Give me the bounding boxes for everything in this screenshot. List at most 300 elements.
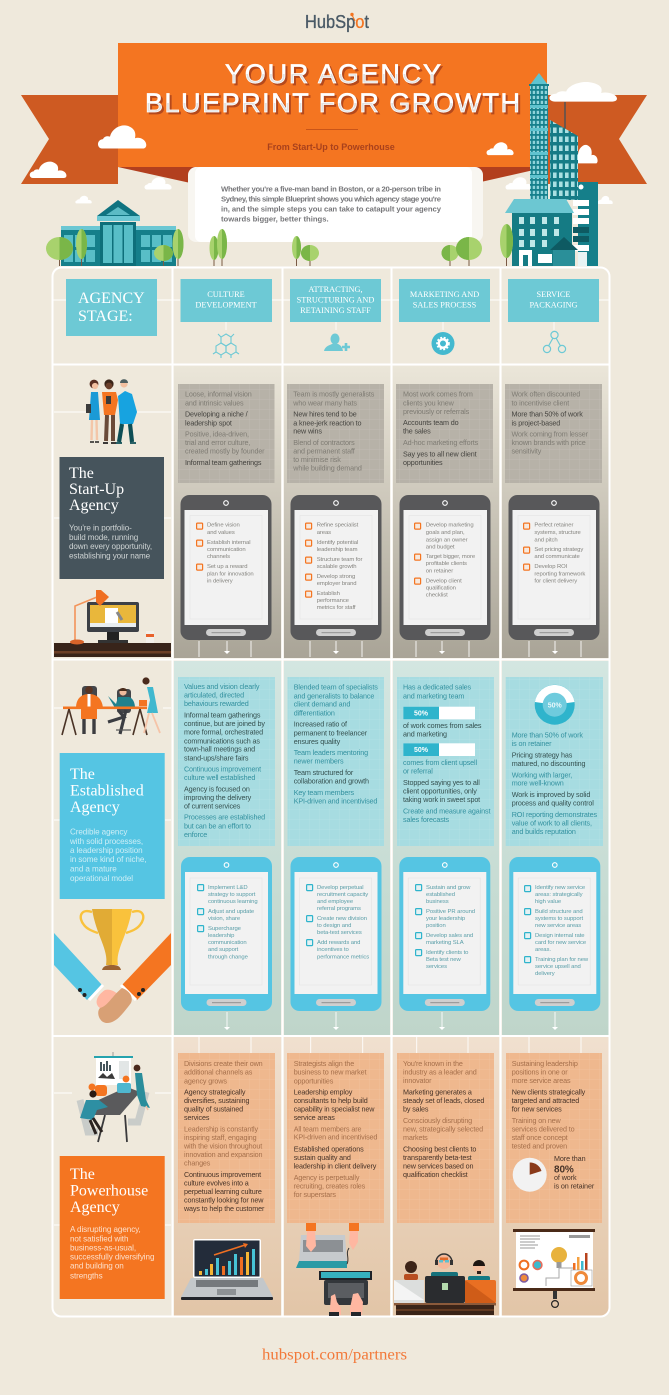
panel: established marketing: comes from client upsell bbox=[403, 758, 478, 767]
panel: powerhouse marketing: Consciously disrupting bbox=[403, 1116, 472, 1125]
phone: established marketing: established bbox=[426, 892, 455, 898]
panel: powerhouse staff: capability in specialist new bbox=[294, 1105, 375, 1114]
header: agency stage bbox=[66, 279, 157, 336]
panel: powerhouse agency: Agency bbox=[70, 1199, 120, 1216]
panel: established marketing: sales forecasts bbox=[403, 815, 450, 824]
panel: established staff: Team leaders mentoring bbox=[294, 748, 368, 757]
panel: powerhouse service bbox=[506, 1053, 602, 1223]
panel: powerhouse culture: Agency strategically bbox=[184, 1088, 246, 1097]
phone: start-up service: and communicate bbox=[534, 554, 580, 560]
illustration: start-up team bbox=[86, 379, 137, 443]
panel: powerhouse agency: The bbox=[70, 1166, 95, 1183]
phone: start-up staff: Develop strong bbox=[317, 574, 355, 580]
panel: powerhouse service: 80% bbox=[554, 1164, 574, 1176]
panel: powerhouse staff: recruiting, creates roles bbox=[294, 1182, 366, 1191]
panel: powerhouse service: New clients strategically bbox=[512, 1088, 586, 1097]
phone: established staff bbox=[290, 857, 382, 1011]
panel: start-up staff: new wins bbox=[293, 427, 322, 436]
phone: start-up marketing: on retainer bbox=[426, 568, 453, 574]
phone: start-up culture: and values bbox=[207, 530, 235, 536]
phone: established marketing: marketing SLA bbox=[426, 940, 464, 946]
header: attracting staff bbox=[290, 279, 381, 322]
panel: start-up marketing: clients you knew bbox=[403, 398, 455, 407]
header: attracting staff: RETAINING STAFF bbox=[300, 306, 371, 315]
panel: powerhouse culture: ways to help the customer bbox=[183, 1204, 265, 1213]
bar: 50% upsell or referral bbox=[403, 743, 475, 756]
header: marketing and sales: MARKETING AND bbox=[410, 290, 479, 299]
phone: established service: Build structure and bbox=[535, 909, 583, 915]
panel: start-up marketing bbox=[396, 384, 493, 483]
panel: powerhouse staff: business to new market bbox=[294, 1068, 366, 1077]
panel: powerhouse staff bbox=[287, 1053, 384, 1223]
panel: established staff: and generalists to balance bbox=[294, 691, 374, 700]
ribbon left bbox=[21, 95, 195, 184]
icon: gear bbox=[432, 332, 454, 355]
panel: established culture: Processes are established bbox=[184, 813, 265, 822]
illustration: team with laptops bbox=[394, 1254, 496, 1315]
panel: start-up agency bbox=[60, 457, 164, 579]
panel: start-up marketing: previously or referrals bbox=[403, 407, 470, 416]
illustration: desk and monitor bbox=[54, 590, 171, 657]
phone: start-up marketing: and budget bbox=[426, 544, 455, 550]
header: service packaging bbox=[508, 279, 599, 322]
ribbon right bbox=[472, 95, 647, 184]
panel: powerhouse service: Sustaining leadership bbox=[512, 1059, 578, 1068]
phone: established culture: strategy to support bbox=[208, 892, 256, 898]
illustration: laptop with growth chart bbox=[181, 1239, 273, 1300]
panel: start-up staff: to minimise risk bbox=[293, 455, 341, 464]
panel: start-up agency: You're in portfolio- bbox=[69, 524, 132, 532]
panel: powerhouse agency: not satisfied with bbox=[70, 1234, 128, 1244]
title bbox=[145, 59, 520, 118]
phone: established staff: to design and bbox=[317, 923, 351, 929]
panel: established agency: with solid processes, bbox=[69, 837, 143, 846]
phone: established culture: continuous learning bbox=[208, 899, 258, 905]
panel: powerhouse service: of work bbox=[554, 1173, 577, 1182]
panel: powerhouse service: services delivered to bbox=[512, 1124, 575, 1133]
panel: established marketing: and marketing team bbox=[403, 691, 464, 700]
panel: established staff: Increased ratio of bbox=[294, 720, 347, 729]
panel: powerhouse culture: diversifies, sustaining bbox=[184, 1096, 249, 1105]
panel: start-up service bbox=[505, 384, 602, 483]
panel: powerhouse culture: with the vision throughout bbox=[183, 1142, 262, 1151]
panel: powerhouse culture: Divisions create their own bbox=[184, 1059, 263, 1068]
panel: powerhouse marketing: qualification checklist bbox=[403, 1170, 468, 1179]
panel: powerhouse staff: for superstars bbox=[294, 1190, 336, 1199]
panel: start-up service: sensitivity bbox=[512, 447, 542, 456]
panel: established culture: Agency is focused on bbox=[184, 784, 250, 793]
phone: start-up marketing: assign an owner bbox=[426, 537, 468, 543]
header: marketing and sales bbox=[399, 279, 490, 322]
phone: start-up staff: Structure team for bbox=[317, 557, 363, 563]
panel: established culture: Continuous improvement bbox=[184, 764, 261, 773]
panel: start-up service: More than 50% of work bbox=[512, 410, 583, 419]
header: service packaging: PACKAGING bbox=[529, 300, 578, 310]
phone: start-up marketing: Target bigger, more bbox=[426, 554, 476, 560]
phone: established marketing: Sustain and grow bbox=[426, 885, 471, 891]
panel: start-up culture: created mostly by founder bbox=[185, 447, 265, 456]
panel: established service: value of work to all clients, bbox=[512, 819, 592, 828]
phone: start-up culture: Set up a reward bbox=[207, 564, 247, 570]
panel: start-up culture: Informal team gatherings bbox=[185, 458, 262, 467]
phone: established staff: incentives to bbox=[317, 947, 350, 953]
panel: established agency: The bbox=[70, 766, 95, 783]
phone: start-up culture bbox=[180, 495, 272, 640]
panel: powerhouse culture: services bbox=[184, 1113, 210, 1122]
right buildings bbox=[505, 73, 598, 266]
arrows above powerhouse boxes bbox=[199, 1037, 581, 1053]
phone: start-up culture: communication bbox=[207, 547, 246, 553]
panel: established staff: Blended team of specialists bbox=[294, 683, 378, 692]
panel: established staff: Key team members bbox=[294, 788, 354, 797]
panel: powerhouse service: More than bbox=[554, 1154, 586, 1163]
footer link: hubspot.com/partners bbox=[262, 1346, 407, 1364]
panel: powerhouse marketing: You're known in the bbox=[403, 1059, 463, 1068]
phone: start-up service bbox=[508, 495, 600, 640]
phone: established staff: Add rewards and bbox=[317, 940, 360, 946]
panel: start-up staff: while building demand bbox=[292, 464, 362, 473]
panel: powerhouse marketing: by sales bbox=[403, 1105, 429, 1114]
donut: 50% on retainer bbox=[535, 685, 575, 725]
header: agency stage: AGENCY bbox=[78, 290, 145, 307]
panel: start-up service: to incentivise client bbox=[512, 398, 569, 407]
phone: start-up staff: Refine specialist bbox=[317, 523, 359, 529]
panel: powerhouse culture: inspiring staff, engaging bbox=[184, 1133, 257, 1142]
panel: start-up service: Work often discounted bbox=[512, 390, 580, 399]
panel: powerhouse marketing: new services based on bbox=[403, 1161, 474, 1170]
bar: 50% upsell or referral: 50% bbox=[414, 747, 429, 754]
phone: start-up culture: Establish internal bbox=[207, 540, 250, 546]
phone: established service: Training plan for new bbox=[535, 957, 589, 963]
left building bbox=[61, 200, 176, 266]
phone: established culture bbox=[181, 857, 272, 1011]
panel: established service: and builds reputation bbox=[512, 827, 576, 836]
panel: powerhouse service: is on retainer bbox=[554, 1181, 595, 1190]
panel: established staff: permanent to freelancer bbox=[294, 728, 368, 737]
panel: powerhouse culture: innovation and expansion bbox=[184, 1150, 263, 1159]
header: culture development bbox=[180, 279, 272, 322]
panel: established service: More than 50% of work bbox=[512, 731, 583, 740]
panel: start-up staff: Blend of contractors bbox=[293, 438, 355, 447]
phone: established marketing: Identify clients to bbox=[426, 950, 469, 956]
panel: powerhouse culture: culture evolves into a bbox=[184, 1179, 249, 1188]
phone: start-up marketing: checklist bbox=[426, 592, 448, 598]
donut: 50% on retainer: 50% bbox=[548, 702, 562, 709]
panel: established service: Pricing strategy has bbox=[512, 750, 573, 759]
panel: established marketing: or referral bbox=[403, 767, 433, 776]
phone: established marketing: Develop sales and bbox=[426, 933, 473, 939]
header: marketing and sales: SALES PROCESS bbox=[413, 300, 477, 310]
phone: established staff: recruitment capacity bbox=[317, 892, 368, 898]
header: culture development: DEVELOPMENT bbox=[195, 300, 257, 310]
phone: established marketing: your leadership bbox=[426, 916, 466, 922]
panel: start-up agency: establishing your name bbox=[69, 552, 151, 560]
panel: established culture: town-hall meetings and bbox=[184, 745, 255, 754]
panel: established staff bbox=[288, 677, 384, 846]
panel: start-up agency: build mode, running bbox=[69, 533, 138, 542]
phone: established culture: Implement L&D bbox=[208, 885, 248, 891]
panel: powerhouse staff: KPI-driven and incentivised bbox=[294, 1133, 377, 1142]
panel: powerhouse marketing: Choosing best clients to bbox=[403, 1144, 476, 1153]
phone: established service: systems to support bbox=[535, 916, 583, 922]
panel: established culture: Values and vision clearly bbox=[184, 682, 260, 691]
phone: established culture: and support bbox=[208, 947, 239, 953]
panel: start-up marketing: the sales bbox=[403, 427, 431, 436]
panel: start-up culture: Positive, idea-driven, bbox=[185, 429, 249, 438]
panel: established agency: Established bbox=[70, 782, 144, 800]
phone: start-up staff: scalable growth bbox=[317, 564, 356, 570]
title: YOUR AGENCY bbox=[225, 59, 441, 89]
panel: start-up marketing: Say yes to all new client bbox=[403, 449, 477, 458]
panel: start-up culture: Loose, informal vision bbox=[185, 390, 252, 399]
phone: start-up staff: metrics for staff bbox=[317, 605, 356, 611]
phone: start-up staff: employer brand bbox=[317, 581, 357, 587]
panel: powerhouse service: positions in one or bbox=[512, 1068, 568, 1077]
guide arrows bbox=[53, 300, 610, 1225]
icon: molecule bbox=[213, 334, 239, 358]
panel: established culture: culture well established bbox=[184, 773, 255, 782]
phone: established staff: performance metrics bbox=[317, 955, 369, 961]
panel: start-up staff: who wear many hats bbox=[292, 398, 357, 407]
phone: established marketing: Positive PR around bbox=[426, 909, 475, 915]
panel: powerhouse service: targeted and attracted bbox=[512, 1096, 579, 1105]
arrows below start-up phones bbox=[199, 641, 581, 657]
panel: established culture bbox=[178, 677, 275, 846]
panel: start-up staff: New hires tend to be bbox=[293, 410, 357, 419]
phone: established culture: communication bbox=[208, 940, 247, 946]
panel: established marketing: of work comes from sales bbox=[403, 721, 482, 730]
phone: established staff: and employee bbox=[317, 899, 354, 905]
panel: established staff: ensures quality bbox=[294, 737, 341, 746]
panel: established marketing: Has a dedicated sales bbox=[403, 683, 472, 692]
phone: established staff: referral programs bbox=[317, 906, 361, 912]
panel: powerhouse agency: A disrupting agency, bbox=[70, 1225, 141, 1234]
grid lines bbox=[52, 267, 610, 1317]
panel: established culture: articulated, directed bbox=[184, 691, 244, 700]
bar: 50% sales and marketing bbox=[403, 707, 475, 719]
phone: established staff: Create new division bbox=[317, 916, 367, 922]
panel: powerhouse service: tested and proven bbox=[512, 1142, 567, 1151]
panel: powerhouse marketing bbox=[397, 1053, 494, 1223]
panel: established marketing: client opportunities, only bbox=[403, 787, 477, 796]
subtitle: From Start-Up to Powerhouse bbox=[267, 142, 395, 152]
phone: established culture: leadership bbox=[208, 933, 235, 939]
panel: powerhouse marketing: industry as a leader and bbox=[403, 1068, 477, 1077]
phone: start-up service: systems, structure bbox=[534, 530, 582, 536]
phone: established staff: beta-test services bbox=[317, 930, 362, 936]
pie: 80% on retainer bbox=[513, 1158, 547, 1192]
panel: powerhouse staff: consultants to help build bbox=[294, 1096, 368, 1105]
panel: established staff: newer members bbox=[294, 757, 344, 766]
panel: established agency: in some kind of niche, bbox=[70, 855, 147, 864]
phone: established service: Design internal rate bbox=[535, 933, 585, 939]
panel: powerhouse staff: sustain quality and bbox=[294, 1153, 351, 1162]
phone: start-up service: and pitch bbox=[534, 537, 558, 543]
panel: powerhouse staff: Established operations bbox=[294, 1144, 364, 1153]
clouds bbox=[30, 82, 617, 204]
stage cells background bbox=[174, 366, 610, 1317]
panel: powerhouse staff: All team members are bbox=[294, 1124, 362, 1133]
panel: established agency: and a mature bbox=[70, 864, 117, 874]
panel: powerhouse culture: Leadership is constantly bbox=[184, 1124, 259, 1133]
panel: established staff: Team structured for bbox=[294, 768, 354, 777]
phone: established marketing: position bbox=[426, 923, 446, 929]
panel: established culture: stand-ups/share fairs bbox=[184, 753, 249, 762]
panel: start-up service: Work coming from lesser bbox=[512, 429, 589, 438]
panel: powerhouse culture: constantly looking for new bbox=[184, 1196, 264, 1205]
phone: start-up service: Set pricing strategy bbox=[534, 547, 583, 553]
panel: powerhouse culture: Continuous improvement bbox=[184, 1170, 261, 1179]
icon: add person bbox=[324, 334, 350, 351]
panel: start-up agency: down every opportunity, bbox=[69, 542, 152, 551]
phone: start-up staff: areas bbox=[317, 530, 331, 536]
panel: powerhouse service: for new services bbox=[512, 1105, 562, 1114]
panel: established staff: KPI-driven and incentivised bbox=[294, 797, 377, 806]
phone: established culture: Adjust and update bbox=[208, 909, 255, 915]
phone: start-up marketing: Develop marketing bbox=[426, 523, 474, 529]
phone: start-up marketing: qualification bbox=[426, 585, 456, 591]
phone: start-up culture: channels bbox=[207, 554, 230, 560]
panel: powerhouse service: staff once concept bbox=[512, 1133, 568, 1142]
panel: powerhouse culture: changes bbox=[184, 1159, 211, 1168]
panel: powerhouse marketing: transparently beta-test bbox=[403, 1153, 472, 1162]
panel: powerhouse marketing: innovator bbox=[403, 1076, 432, 1085]
panel: established marketing: and marketing bbox=[403, 730, 447, 739]
panel: powerhouse staff: opportunities bbox=[294, 1076, 334, 1085]
phone: start-up staff: Identify potential bbox=[317, 540, 358, 546]
phone: established service: areas: strategically bbox=[535, 892, 583, 898]
phone: start-up marketing: profitable clients bbox=[426, 561, 467, 567]
panel: powerhouse agency: strengths bbox=[70, 1271, 103, 1280]
panel: established culture: communications such as bbox=[184, 736, 260, 745]
panel: established marketing: Stopped saying yes to all bbox=[403, 778, 480, 787]
phone: start-up culture: in delivery bbox=[207, 578, 233, 584]
phone: start-up marketing: Develop client bbox=[426, 578, 462, 584]
phone: established marketing: business bbox=[426, 899, 449, 905]
panel: established service: process and quality control bbox=[512, 799, 594, 808]
HubSpot logo: HubSpot bbox=[305, 12, 369, 32]
header: service packaging: SERVICE bbox=[537, 290, 570, 299]
panel: powerhouse culture: quality of sustained bbox=[184, 1105, 243, 1114]
panel: powerhouse staff: leadership in client delivery bbox=[294, 1161, 377, 1170]
phone: start-up service: Perfect retainer bbox=[534, 523, 574, 529]
panel: established service bbox=[506, 677, 603, 846]
phone: established culture: vision, share bbox=[208, 916, 241, 922]
illustration: presentation board bbox=[513, 1229, 595, 1307]
panel: start-up culture: leadership spot bbox=[185, 418, 232, 427]
phone: established marketing: services bbox=[426, 964, 447, 970]
panel: established service: more well-known bbox=[512, 779, 564, 788]
panel: established marketing: taking work in sweet spot bbox=[403, 795, 480, 804]
phone: established marketing bbox=[399, 857, 490, 1011]
phone: established culture: Supercharge bbox=[208, 926, 242, 932]
panel: start-up marketing: Accounts team do bbox=[403, 418, 459, 427]
phone: start-up culture: plan for innovation bbox=[207, 571, 254, 577]
intro paper backing bbox=[188, 167, 483, 242]
panel: start-up staff bbox=[287, 384, 384, 483]
panel: powerhouse staff: Strategists align the bbox=[294, 1059, 354, 1068]
panel: powerhouse culture: agency grows bbox=[184, 1076, 227, 1085]
panel: start-up culture bbox=[178, 384, 274, 483]
header: agency stage: STAGE: bbox=[78, 308, 133, 325]
phone: start-up service: reporting framework bbox=[534, 571, 585, 577]
panel: established agency: a leadership position bbox=[70, 846, 143, 855]
title: BLUEPRINT FOR GROWTH bbox=[145, 88, 520, 118]
title banner bbox=[118, 43, 547, 167]
panel: established culture: enforce bbox=[184, 830, 207, 839]
phone: established service: Identify new service bbox=[535, 885, 586, 891]
panel: established agency: Credible agency bbox=[70, 828, 128, 836]
panel: powerhouse agency: Powerhouse bbox=[70, 1182, 148, 1200]
phone: start-up service: for client delivery bbox=[534, 578, 577, 584]
panel: established culture: more formal, orchestrated bbox=[184, 728, 263, 737]
panel: established staff: client demand and bbox=[294, 700, 350, 709]
panel: powerhouse marketing: Marketing generates a bbox=[403, 1088, 472, 1097]
phone: start-up staff bbox=[290, 495, 382, 640]
panel: powerhouse agency: and building on bbox=[70, 1262, 124, 1271]
phone: established service: high value bbox=[535, 899, 562, 905]
phone: established marketing: Beta test new bbox=[426, 957, 461, 963]
panel: start-up staff: a knee-jerk reaction to bbox=[293, 418, 362, 427]
panel: established service: ROI reporting demonstrates bbox=[512, 810, 598, 819]
panel: powerhouse agency: business-as-usual, bbox=[70, 1244, 136, 1252]
panel: established staff: differentiation bbox=[294, 708, 335, 717]
header: attracting staff: STRUCTURING AND bbox=[297, 296, 374, 304]
panel: start-up culture: and intrinsic values bbox=[185, 398, 244, 407]
panel: established agency bbox=[60, 753, 165, 899]
intro text: in, and the simple steps you can take to catapult your agency bbox=[221, 204, 442, 214]
panel: established culture: behaviours rewarded bbox=[184, 699, 249, 708]
panel: start-up culture: Developing a niche / bbox=[185, 410, 248, 419]
panel: start-up culture: trial and error culture, bbox=[185, 438, 250, 447]
panel: established marketing: Create and measure against bbox=[403, 806, 490, 815]
panel: established agency: operational model bbox=[70, 874, 133, 883]
intro text: Whether you're a five-man band in Boston, or a 20-person tribe in bbox=[221, 184, 441, 194]
phone: established service: delivery bbox=[535, 971, 555, 977]
panel: powerhouse marketing: new, strategically selected bbox=[403, 1124, 483, 1133]
panel: start-up service: is project-based bbox=[512, 418, 560, 427]
panel: powerhouse agency: successfully diversifying bbox=[70, 1253, 154, 1262]
phone: established culture: through change bbox=[208, 955, 249, 961]
icon: connected circles bbox=[543, 331, 566, 353]
trees bbox=[46, 224, 513, 266]
panel: established marketing bbox=[397, 677, 494, 846]
panel: powerhouse culture: additional channels as bbox=[184, 1068, 253, 1077]
intro text: Sydney, this simple Blueprint shows you which agency stage you're bbox=[221, 194, 442, 204]
phone: start-up marketing bbox=[400, 495, 490, 640]
phone: established service: areas. bbox=[535, 947, 551, 953]
panel: start-up marketing: opportunities bbox=[403, 458, 443, 467]
panel: powerhouse culture bbox=[178, 1053, 275, 1223]
phone: established service bbox=[509, 857, 600, 1011]
bar: 50% sales and marketing: 50% bbox=[414, 711, 429, 718]
phone: start-up culture: Define vision bbox=[207, 523, 240, 529]
panel: established service: Work is improved by solid bbox=[512, 790, 590, 799]
panel: established service: is on retainer bbox=[512, 739, 552, 748]
arrows below established phones bbox=[224, 1012, 558, 1030]
phone: start-up marketing: goals and plan, bbox=[426, 530, 465, 536]
panel: established culture: of current services bbox=[184, 802, 241, 811]
phone: established service: service upsell and bbox=[535, 964, 581, 970]
panel: powerhouse service: more service areas bbox=[512, 1076, 571, 1085]
panel: powerhouse marketing: steady set of leads, closed bbox=[403, 1096, 484, 1105]
panel: established agency: Agency bbox=[70, 799, 120, 816]
panel: established staff: collaboration and growth bbox=[294, 777, 369, 786]
panel: established service: Working with larger, bbox=[512, 770, 572, 779]
panel: powerhouse service: Training on new bbox=[512, 1116, 562, 1125]
panel: established culture: Informal team gatherings bbox=[184, 711, 261, 720]
panel: powerhouse staff: service areas bbox=[294, 1113, 335, 1122]
